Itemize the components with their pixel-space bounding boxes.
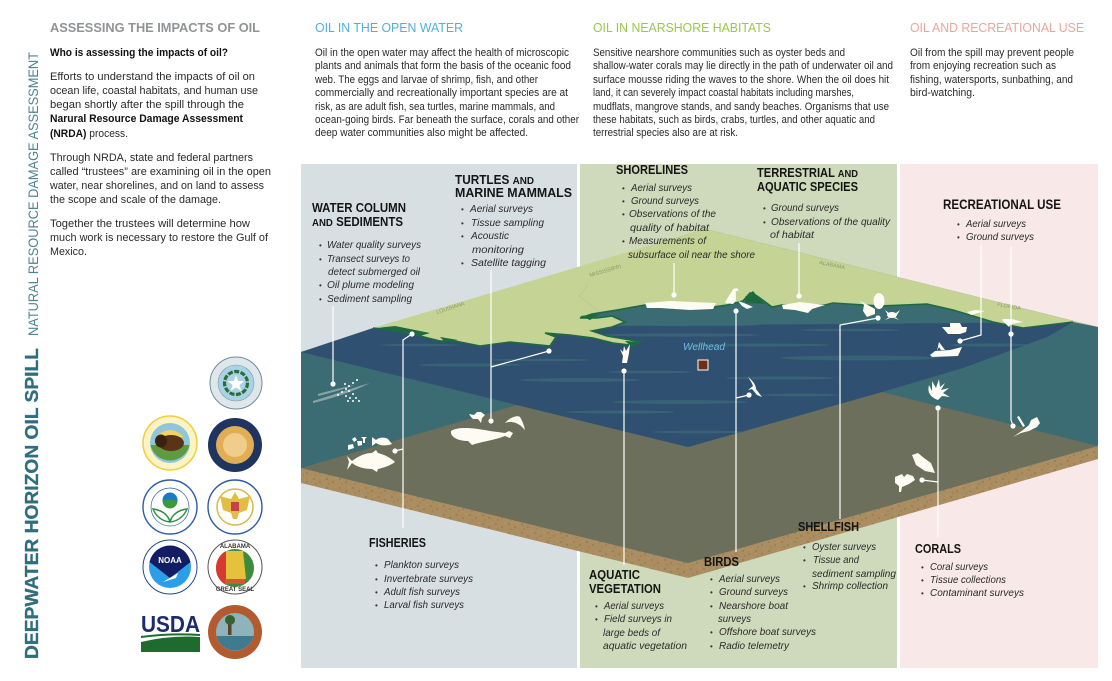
- callout: water column and sediments: Water quality surveys: [327, 239, 422, 251]
- paragraph: recreational use: fishing, watersports, sunbathing, and: [910, 74, 1073, 86]
- callout: shellfish: Oyster surveys: [812, 541, 877, 553]
- callout: shorelines: •: [622, 210, 625, 219]
- paragraph: nearshore: mudflats, mangrove stands, and sandy beaches. Organisms that use: [593, 101, 889, 113]
- callout: shorelines: Measurements of: [629, 235, 707, 247]
- state labels: LOUISIANA: [436, 301, 466, 316]
- leader: water column: [332, 306, 334, 384]
- paragraph: open water: deep water communities also might be affected.: [315, 127, 528, 139]
- callout: corals: Coral surveys: [930, 561, 989, 573]
- callout: recreational use: Ground surveys: [966, 231, 1035, 243]
- icon: heron: [738, 301, 753, 309]
- callout: shellfish: •: [803, 582, 806, 591]
- callout: corals: CORALS: [915, 542, 961, 556]
- leader: shellfish: [840, 318, 878, 519]
- land: Gulf coast: [373, 229, 1098, 346]
- panel: intro text column: [49, 20, 271, 258]
- callout: recreational use: Aerial surveys: [965, 218, 1027, 230]
- icon: shore litter: [1002, 319, 1012, 326]
- callout: fisheries: •: [375, 561, 378, 570]
- callout: aquatic vegetation: AQUATIC: [589, 568, 640, 582]
- leader: turtles and marine mammals: [491, 270, 549, 421]
- icon: sea turtle: [469, 412, 485, 423]
- panel: recreational use background: [900, 164, 1098, 668]
- callout: shellfish: •: [803, 556, 806, 565]
- icon: sperm whale: [451, 428, 513, 445]
- paragraph: efforts: (NRDA) process.: [50, 128, 128, 140]
- callout: birds: [704, 555, 817, 652]
- icon: recreational boat: [942, 323, 967, 334]
- callout: corals: Contaminant surveys: [930, 587, 1025, 599]
- leader lines with callout dots: [333, 243, 1013, 565]
- callout: fisheries: •: [375, 588, 378, 597]
- icon: plankton and plume streaks: [313, 379, 370, 403]
- callout: birds: Nearshore boat: [719, 600, 789, 612]
- callout: terrestrial and aquatic species: AQUATIC SPECIES: [757, 180, 858, 194]
- callout: aquatic vegetation: •: [595, 615, 598, 624]
- dark blue nearshore water: [301, 322, 1073, 447]
- callout: water column and sediments: [312, 201, 422, 305]
- callout: shorelines: •: [622, 184, 625, 193]
- callout: water column and sediments: •: [319, 281, 322, 290]
- callout: terrestrial and aquatic species: TERRESTRIAL AND: [757, 166, 858, 180]
- leader: recreational boats: [960, 245, 981, 341]
- callout: turtles and marine mammals: •: [461, 219, 464, 228]
- icon: aquatic vegetation: [620, 344, 630, 363]
- callout: shellfish: Tissue and: [813, 554, 860, 566]
- callout: aquatic vegetation: •: [595, 602, 598, 611]
- paragraph: efforts: began shortly after the spill through the: [50, 99, 244, 111]
- panel: oil and recreational use intro: [910, 20, 1084, 99]
- callout: terrestrial and aquatic species: Ground surveys: [771, 202, 840, 214]
- heading: oil in the open water: OIL IN THE OPEN WATER: [315, 20, 463, 35]
- paragraph: together: much work is necessary to restore the Gulf of: [50, 232, 269, 244]
- paragraph: nearshore: land, it can severely impact coastal habitats including marshes,: [593, 87, 854, 99]
- callout: water column and sediments: •: [319, 295, 322, 304]
- callout: shellfish: [798, 520, 896, 592]
- seal: Alabama: GREAT SEAL: [216, 587, 254, 593]
- paragraph: efforts: Efforts to understand the impacts of oil on: [50, 71, 255, 83]
- panel: open water background: [301, 164, 577, 668]
- callout: corals: •: [921, 576, 924, 585]
- paragraph: open water: web. The eggs and larvae of shrimp, fish, and other: [314, 74, 538, 86]
- callout: turtles and marine mammals: [455, 173, 572, 269]
- callout: turtles and marine mammals: monitoring: [472, 244, 524, 256]
- paragraph: efforts: Narural Resource Damage Assessment: [50, 113, 243, 125]
- paragraph: through NRDA: water, near shorelines, and on land to assess: [49, 180, 264, 192]
- paragraph: through NRDA: the scope and scale of the damage.: [50, 194, 221, 206]
- callout: fisheries: Larval fish surveys: [384, 599, 465, 611]
- callout: aquatic vegetation: large beds of: [603, 627, 661, 639]
- callout: shellfish: SHELLFISH: [798, 520, 859, 534]
- callout: corals: •: [921, 563, 924, 572]
- callout: water column and sediments: AND SEDIMENTS: [312, 215, 403, 229]
- callout: shorelines: [616, 163, 755, 261]
- paragraph: open water: risk, as are adult fish, sea turtles, marine mammals, and: [315, 101, 555, 113]
- paragraph: open water: plants and animals that form the basis of the oceanic food: [315, 60, 571, 72]
- paragraph: through NRDA: called “trustees” are examining oil in the open: [50, 166, 271, 178]
- callout: birds: •: [710, 588, 713, 597]
- paragraph: together: Together the trustees will determine how: [50, 218, 250, 230]
- logo: USDA: [141, 611, 200, 652]
- callout: terrestrial and aquatic species: •: [763, 218, 766, 227]
- callout: corals: Tissue collections: [930, 574, 1007, 586]
- icon: branching coral: [895, 474, 915, 492]
- leader: birds: [736, 311, 749, 552]
- callout: turtles and marine mammals: Aerial surveys: [469, 203, 534, 215]
- icon: pelican: [725, 288, 739, 304]
- seal: NOAA: NOAA: [158, 556, 182, 565]
- callout: shorelines: Observations of the: [629, 208, 716, 220]
- diagram: Gulf of Mexico block: [301, 229, 1098, 578]
- callout: shellfish: Shrimp collection: [812, 580, 888, 592]
- paragraph: through NRDA: [49, 152, 271, 206]
- callout: water column and sediments: Oil plume modeling: [327, 279, 414, 291]
- paragraph: open water: ocean-going birds. Far beneath the surface, corals and other: [315, 114, 579, 126]
- paragraph: nearshore: Sensitive nearshore communities such as oyster beds and: [593, 47, 845, 59]
- state labels: [436, 260, 1021, 316]
- callout: water column and sediments: •: [319, 255, 322, 264]
- callout: fisheries: Adult fish surveys: [383, 586, 461, 598]
- callout: shellfish: •: [803, 543, 806, 552]
- leader: aquatic vegetation: [623, 371, 625, 565]
- paragraph: nearshore: terrestrial species also are at risk.: [593, 127, 738, 139]
- callout: shorelines: subsurface oil near the shore: [628, 249, 755, 261]
- callout: birds: surveys: [718, 613, 752, 625]
- heading: assessing the impacts of oil: ASSESSING THE IMPACTS OF OIL: [50, 20, 260, 35]
- icon: sea fan: [912, 453, 935, 473]
- seal: EPA: [143, 480, 197, 534]
- vertical title: Deepwater Horizon Oil Spill: DEEPWATER HORIZON OIL SPILL: [21, 348, 42, 659]
- icon: flying seabird: [748, 377, 762, 397]
- callout: shorelines: quality of habitat: [630, 222, 710, 234]
- wetland patches: [377, 291, 765, 347]
- callout: fisheries: [369, 536, 474, 611]
- subheading: who is assessing: Who is assessing the impacts of oil?: [50, 47, 228, 59]
- callout: shorelines: •: [622, 197, 625, 206]
- callout: birds: •: [710, 575, 713, 584]
- paragraph: recreational use: [910, 47, 1074, 99]
- paragraph: open water: Oil in the open water may affect the health of microscopic: [315, 47, 569, 59]
- coastal wetlands: [373, 293, 1073, 346]
- callout: aquatic vegetation: Field surveys in: [604, 613, 672, 625]
- state border: [579, 285, 600, 312]
- icons: white silhouettes: [313, 288, 1040, 492]
- icon: fan coral: [928, 379, 950, 400]
- seal: Department of the Interior: [143, 416, 197, 470]
- callout: birds: •: [710, 602, 713, 611]
- callout: turtles and marine mammals: Acoustic: [470, 230, 510, 242]
- state labels: MISSISSIPPI: [589, 264, 622, 279]
- callout: turtles and marine mammals: •: [461, 259, 464, 268]
- callout: birds: •: [710, 642, 713, 651]
- callout: turtles and marine mammals: •: [461, 205, 464, 214]
- callout: water column and sediments: Sediment sampling: [327, 293, 412, 305]
- paragraph: through NRDA: Through NRDA, state and federal partners: [50, 152, 253, 164]
- seal: Alabama: [208, 540, 262, 594]
- callout: shorelines: Ground surveys: [631, 195, 700, 207]
- callout: corals: •: [921, 589, 924, 598]
- callout: terrestrial and aquatic species: Observations of the quality: [771, 216, 891, 228]
- paragraph: efforts: [50, 71, 258, 140]
- icon: wading bird: [860, 301, 875, 317]
- seal: Alabama: ALABAMA: [220, 544, 251, 550]
- callout: fisheries: FISHERIES: [369, 536, 426, 550]
- callout: aquatic vegetation: VEGETATION: [589, 582, 661, 596]
- callout: birds: •: [710, 628, 713, 637]
- icon: fishing boat: [930, 342, 962, 357]
- sand sediment edge: [301, 446, 1098, 578]
- paragraph: recreational use: bird-watching.: [910, 87, 975, 99]
- teal open water: [301, 229, 1098, 563]
- callout: birds: Aerial surveys: [718, 573, 781, 585]
- callout: birds: Ground surveys: [719, 586, 789, 598]
- paragraph: open water: [314, 47, 579, 139]
- agency seals and logos: [141, 357, 262, 659]
- heading: oil and recreational use: OIL AND RECREATIONAL USE: [910, 20, 1084, 35]
- callout: fisheries: •: [375, 575, 378, 584]
- paragraph: nearshore: these habitats, such as birds, crabs, turtles, and other aquatic and: [593, 114, 875, 126]
- callout: water column and sediments: •: [319, 241, 322, 250]
- callout: turtles and marine mammals: Satellite tagging: [471, 257, 546, 269]
- paragraph: nearshore: [593, 47, 893, 139]
- callout: fisheries: •: [375, 601, 378, 610]
- callout: shellfish: sediment sampling: [812, 568, 896, 580]
- state labels: ALABAMA: [819, 260, 846, 271]
- callout: birds: BIRDS: [704, 555, 739, 569]
- callout: birds: Radio telemetry: [719, 640, 790, 652]
- icon: scuba diver: [1013, 416, 1040, 437]
- paragraph: nearshore: shallow-water corals may lie directly in the path of underwater oil and: [593, 60, 893, 72]
- paragraph: recreational use: from enjoying recreation such as: [910, 60, 1056, 72]
- callout: shorelines: Aerial surveys: [630, 182, 693, 194]
- wellhead: [683, 341, 726, 370]
- callout: aquatic vegetation: Aerial surveys: [603, 600, 665, 612]
- callout: aquatic vegetation: aquatic vegetation: [603, 640, 687, 652]
- state labels: FLORIDA: [997, 302, 1021, 312]
- callout: water column and sediments: WATER COLUMN: [312, 201, 406, 215]
- seal: Florida: [208, 605, 262, 659]
- paragraph: nearshore: surface mousse riding the waves to the shore. When the oil does hit: [593, 74, 889, 86]
- callout: recreational use: •: [957, 220, 960, 229]
- leader: shorelines: [673, 263, 675, 295]
- icon: larval fish: [348, 437, 367, 450]
- leader: recreational diver: [1011, 247, 1013, 426]
- paragraph: efforts: ocean life, coastal habitats, and human use: [50, 85, 258, 97]
- callout: birds: Offshore boat surveys: [719, 626, 817, 638]
- paragraph: together: Mexico.: [50, 246, 87, 258]
- panel: oil in the open water intro: [314, 20, 579, 139]
- leader: corals: [922, 408, 938, 537]
- callout: aquatic vegetation: [589, 568, 687, 652]
- wellhead: Wellhead: [683, 341, 726, 353]
- seal: NOAA: [143, 540, 197, 594]
- panel: oil in nearshore habitats intro: [593, 20, 893, 139]
- leader: fisheries: [395, 334, 412, 528]
- icon: tuna: [347, 450, 395, 472]
- callout: fisheries: Plankton surveys: [384, 559, 460, 571]
- sea floor: [301, 392, 1098, 563]
- icon: dolphin: [505, 416, 525, 430]
- paragraph: recreational use: Oil from the spill may prevent people: [910, 47, 1074, 59]
- water texture streaks: [380, 324, 1030, 433]
- callout dots: [330, 292, 1016, 483]
- icon: oyster: [874, 293, 884, 309]
- paragraph: open water: commercially and recreationally important species are at: [315, 87, 568, 99]
- panel: nearshore habitats background: [580, 164, 897, 668]
- oil on shoreline: [645, 301, 1023, 327]
- logo: USDA: USDA: [141, 611, 200, 637]
- callout: terrestrial and aquatic species: [757, 166, 891, 241]
- seal: Texas: [210, 357, 262, 409]
- seal: Mississippi: [208, 480, 262, 534]
- callout: terrestrial and aquatic species: •: [763, 204, 766, 213]
- callout: turtles and marine mammals: MARINE MAMMALS: [455, 186, 572, 200]
- callout: water column and sediments: detect submerged oil: [328, 266, 421, 278]
- callout: recreational use: [943, 197, 1061, 243]
- callout: corals: [915, 542, 1025, 599]
- callout: recreational use: •: [957, 233, 960, 242]
- callout: fisheries: Invertebrate surveys: [384, 573, 474, 585]
- callout: turtles and marine mammals: Tissue sampling: [471, 217, 544, 229]
- leader: terrestrial species: [798, 243, 800, 296]
- callout: turtles and marine mammals: •: [461, 232, 464, 241]
- callout: recreational use: RECREATIONAL USE: [943, 197, 1061, 212]
- seal: Louisiana: [208, 418, 262, 472]
- callout: shorelines: SHORELINES: [616, 163, 688, 177]
- callout: water column and sediments: Transect surveys to: [327, 253, 410, 265]
- vertical subtitle: Natural Resource Damage Assessment: NATURAL RESOURCE DAMAGE ASSESSMENT: [25, 52, 41, 336]
- heading: oil in nearshore habitats: OIL IN NEARSHORE HABITATS: [593, 20, 771, 35]
- callout: turtles and marine mammals: TURTLES AND: [455, 173, 534, 187]
- icon: small fish: [372, 437, 392, 446]
- icon: crab: [885, 310, 900, 320]
- paragraph: together: [50, 218, 269, 258]
- callout: terrestrial and aquatic species: of habitat: [770, 229, 815, 241]
- callout: shorelines: •: [622, 237, 625, 246]
